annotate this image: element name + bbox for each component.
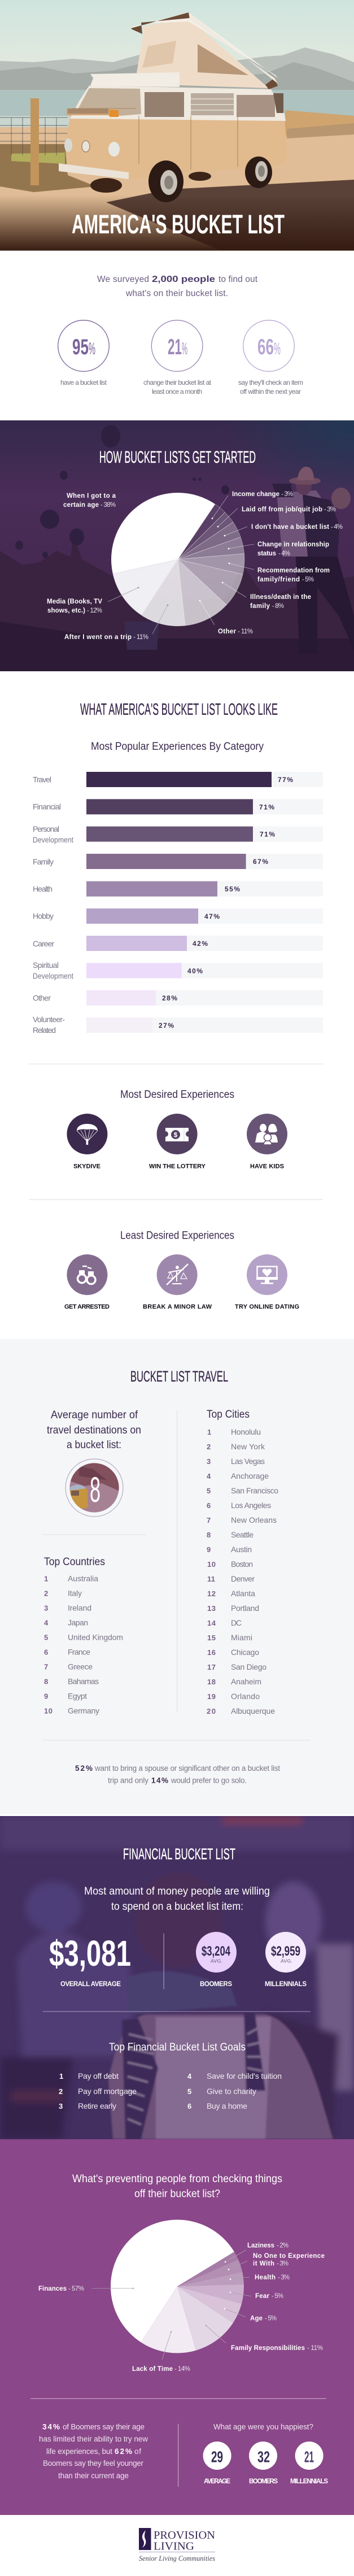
logo: provision living <box>139 2528 215 2562</box>
list: top cities: Chicago <box>231 1648 259 1657</box>
happiest age stats: 32 <box>257 2448 270 2465</box>
bar chart: experiences by category: 71% <box>260 831 275 839</box>
van body <box>65 86 287 179</box>
intro text: 2,000 people <box>152 275 215 284</box>
list: top cities: New York <box>231 1442 265 1451</box>
list: top cities: 3 <box>207 1457 211 1466</box>
stat circle: 8 destinations: 8 <box>90 1470 100 1510</box>
callout: travel companions <box>75 1764 280 1784</box>
list: top cities: New Orleans <box>231 1515 277 1524</box>
bar chart: experiences by category: Financial <box>33 802 61 811</box>
callout: boomers age text: Boomers say they feel younger <box>43 2459 143 2468</box>
pie 2 labels: - 3% <box>278 2274 290 2281</box>
pie labels: - 3% <box>281 491 293 498</box>
pie labels: status <box>257 550 276 557</box>
intro text: what's on their bucket list. <box>125 289 228 298</box>
icon: have kids <box>247 1114 287 1170</box>
pie labels: - 3% <box>324 506 336 513</box>
pie 2 labels <box>38 2243 325 2373</box>
list: top countries: Bahamas <box>68 1677 99 1686</box>
heading: financial bucket list: FINANCIAL BUCKET LIST <box>123 1845 235 1862</box>
stat: 95% have a bucket list <box>58 320 109 386</box>
bar chart: experiences by category: Family <box>33 857 54 866</box>
pie chart: what prevents people <box>111 2219 244 2353</box>
list: top countries: Top Countries <box>44 1556 105 1568</box>
pie 2 labels: - 5% <box>265 2316 277 2322</box>
pie labels: When I got to a <box>67 493 116 499</box>
list: top cities: 9 <box>207 1545 211 1554</box>
callout: boomers age text: life experiences, but <box>46 2447 112 2456</box>
logo: provision living: LIVING <box>154 2540 194 2553</box>
list: top cities: 7 <box>207 1516 211 1524</box>
van pop-top tent <box>137 18 269 88</box>
bar chart: experiences by category: 40% <box>187 967 203 975</box>
list: top cities: San Diego <box>231 1662 266 1671</box>
list: top cities: 10 <box>207 1560 216 1569</box>
stat: 95% have a bucket list: 95 <box>72 335 89 359</box>
list: top cities: 8 <box>207 1531 211 1539</box>
list: top countries: 4 <box>44 1618 49 1627</box>
stat: 95% have a bucket list: have a bucket list <box>60 379 107 386</box>
stat: 21% change list monthly: 21 <box>168 335 182 359</box>
list: top cities: Los Angeles <box>231 1501 271 1510</box>
list: top financial goals: 4 <box>187 2072 192 2080</box>
list: top countries: 10 <box>44 1706 53 1715</box>
list: top cities: Boston <box>231 1559 253 1569</box>
list: top financial goals <box>59 2041 282 2110</box>
list: top countries: 2 <box>44 1589 48 1598</box>
text: average number of destinations <box>47 1409 141 1451</box>
bar chart: experiences by category: Development <box>33 835 73 844</box>
stat: overall average: $3,081 <box>49 1933 131 1974</box>
panel: hero photo of camper van <box>0 0 354 251</box>
bar chart: experiences by category: 67% <box>253 858 268 866</box>
list: top cities: 14 <box>207 1619 216 1627</box>
list: top cities: 2 <box>207 1443 211 1451</box>
man with camera silhouette <box>272 467 354 654</box>
list: top financial goals: Top Financial Bucket List Goals <box>109 2041 246 2053</box>
icon: get arrested: GET ARRESTED <box>64 1304 110 1310</box>
bar chart: experiences by category: Career <box>33 939 54 948</box>
list: top financial goals: 2 <box>59 2087 63 2096</box>
heading: what's preventing people: off their bucket list? <box>134 2188 220 2200</box>
pie labels: family/friend <box>257 576 300 583</box>
list: top cities: Portland <box>231 1604 259 1613</box>
callout: boomers age text: has limited their ability to try new <box>39 2435 148 2443</box>
list: top countries: Japan <box>68 1618 88 1627</box>
pie labels: - 4% <box>278 550 290 557</box>
list: top cities: 11 <box>207 1575 215 1583</box>
bar chart: experiences by category: 42% <box>193 940 208 948</box>
pie labels: Laid off from job/quit job <box>242 506 322 513</box>
stat: millennials: MILLENNIALS <box>265 1981 307 1988</box>
callout: boomers age text: 62% <box>115 2447 132 2456</box>
subheading: least desired experiences: Least Desired Experiences <box>120 1230 234 1242</box>
list: top countries: Egypt <box>68 1692 87 1701</box>
callout: boomers age text: 34% <box>42 2423 60 2431</box>
icon: try online dating <box>235 1254 299 1310</box>
pie labels: After I went on a trip <box>64 634 132 641</box>
happiest age stats <box>203 2423 328 2485</box>
list: top cities: 13 <box>207 1604 216 1613</box>
icon: skydive: SKYDIVE <box>73 1163 100 1170</box>
bar chart: experiences by category <box>33 772 323 1035</box>
stat: 21% change list monthly <box>143 320 212 396</box>
callout: travel companions: 52% <box>75 1764 93 1773</box>
list: top cities: Miami <box>231 1633 252 1642</box>
list: top cities: Top Cities <box>207 1409 250 1421</box>
bar chart: experiences by category: 71% <box>259 803 274 811</box>
callout: boomers age text: than their current age <box>58 2471 129 2480</box>
subheading: most popular experiences: Most Popular Experiences By Category <box>91 741 264 753</box>
bar chart: experiences by category: Health <box>33 884 53 893</box>
pie labels: - 12% <box>87 607 102 614</box>
pie labels <box>47 491 343 641</box>
icon: win the lottery <box>149 1114 206 1170</box>
pie 2 labels: Finances <box>38 2286 67 2292</box>
icon: have kids: HAVE KIDS <box>250 1163 284 1170</box>
text: average number of destinations: a bucket list: <box>67 1439 121 1451</box>
list: top financial goals: Save for child's tuition <box>207 2071 282 2080</box>
bar chart: experiences by category: Spiritual <box>33 961 59 970</box>
list: top countries: France <box>68 1648 90 1657</box>
subheading: most desired experiences: Most Desired Experiences <box>120 1089 234 1101</box>
list: top countries: 9 <box>44 1692 48 1701</box>
pie 2 labels: Fear <box>255 2293 270 2300</box>
intro text <box>97 275 258 298</box>
list: top countries: 3 <box>44 1604 48 1613</box>
pie 2 labels: - 3% <box>277 2261 289 2267</box>
icon: win the lottery: $ <box>174 1131 178 1139</box>
bar chart: experiences by category: Related <box>33 1026 56 1035</box>
bar chart: experiences by category: 47% <box>204 913 220 920</box>
list: top countries: United Kingdom <box>68 1633 123 1642</box>
stat: 66% check an item off: 66 <box>257 335 274 359</box>
pie 2 labels: - 11% <box>307 2345 323 2352</box>
stat: 66% check an item off: off within the next year <box>240 388 301 396</box>
list: top financial goals: Retire early <box>78 2101 116 2110</box>
pie 2 labels: Lack of Time <box>132 2366 173 2373</box>
stat: boomers: $3,204 <box>202 1944 230 1959</box>
icon: fence post <box>30 98 39 185</box>
intro text: We surveyed <box>97 275 149 284</box>
logo: provision living: Senior Living Communities <box>139 2555 215 2562</box>
happiest age stats: 21 <box>304 2448 314 2465</box>
list: top countries: 6 <box>44 1648 48 1657</box>
van bumper <box>59 163 129 179</box>
list: top countries: 1 <box>44 1574 48 1583</box>
icon: break a minor law: BREAK A MINOR LAW <box>143 1304 212 1310</box>
stat: 66% check an item off: say they'll check an item <box>238 379 303 386</box>
callout: travel companions: want to bring a spouse or significant other on a bucket list <box>94 1764 280 1773</box>
heading: what's preventing people <box>72 2173 282 2200</box>
list: top cities: 5 <box>207 1487 211 1495</box>
intro text: to find out <box>218 275 258 284</box>
happiest age stats: BOOMERS <box>249 2478 278 2485</box>
van wheels <box>90 157 272 202</box>
pie labels: I don't have a bucket list <box>251 524 329 531</box>
pie chart: how lists get started <box>111 493 244 626</box>
callout: travel companions: 14% <box>151 1776 168 1784</box>
icon: win the lottery: WIN THE LOTTERY <box>149 1163 206 1170</box>
stat: boomers <box>196 1932 237 1988</box>
list: top cities: San Francisco <box>231 1486 278 1495</box>
list: top cities: Las Vegas <box>231 1457 265 1466</box>
stat: millennials <box>265 1932 307 1988</box>
icon: break a minor law <box>143 1254 212 1310</box>
pie labels: - 11% <box>133 634 148 641</box>
van headlights <box>64 138 120 157</box>
stat: 66% check an item off: % <box>274 340 281 358</box>
list: top countries <box>44 1556 123 1715</box>
callout: boomers age text <box>39 2423 148 2480</box>
list: top financial goals: Pay off mortgage <box>78 2087 137 2096</box>
list: top financial goals: Buy a home <box>207 2101 247 2110</box>
bar chart: experiences by category: Travel <box>33 775 51 784</box>
icon: get arrested <box>64 1254 110 1310</box>
panel: financial bucket list background <box>0 1816 354 2139</box>
list: top cities: 16 <box>207 1648 216 1657</box>
list: top cities: Albuquerque <box>231 1706 275 1715</box>
stat: boomers: AVG. <box>211 1958 222 1964</box>
stat: 21% change list monthly: % <box>182 340 187 358</box>
pie leader lines and dots <box>108 496 254 634</box>
bar chart: experiences by category: 27% <box>159 1022 174 1029</box>
bar chart: experiences by category: Volunteer- <box>33 1015 65 1024</box>
pie labels: Other <box>218 628 237 635</box>
heading: what's preventing people: What's preventing people from checking things <box>72 2173 282 2185</box>
list: top financial goals: 6 <box>187 2102 191 2110</box>
list: top countries: Ireland <box>68 1604 91 1613</box>
pie 2 labels: it With <box>253 2261 274 2267</box>
icon: try online dating: TRY ONLINE DATING <box>235 1304 299 1310</box>
list: top cities: 19 <box>207 1692 216 1701</box>
list: top cities: 4 <box>207 1472 211 1480</box>
stat: 21% change list monthly: change their bucket list at <box>143 379 212 386</box>
text: average number of destinations: Average number of <box>51 1409 138 1421</box>
pie labels: - 38% <box>100 502 116 509</box>
pie labels: - 11% <box>238 628 253 635</box>
happiest age stats: MILLENNIALS <box>290 2478 328 2485</box>
list: top cities: 6 <box>207 1501 211 1510</box>
panel: bucket list travel background <box>0 1339 354 1814</box>
van pop-top roof <box>131 12 278 78</box>
stat: millennials: $2,959 <box>271 1944 300 1959</box>
pie labels: Recommendation from <box>257 567 330 574</box>
stat: 66% check an item off <box>238 320 303 396</box>
pie 2 labels: - 5% <box>272 2293 283 2300</box>
pie 2 labels: - 14% <box>174 2366 190 2373</box>
icon: skydive <box>67 1114 107 1170</box>
panel: how bucket lists get started background <box>0 420 354 671</box>
pie labels: - 4% <box>331 524 343 531</box>
list: top cities: Seattle <box>231 1530 254 1539</box>
pie labels: - 5% <box>302 576 314 583</box>
logo: provision living: PROVISION <box>154 2529 215 2542</box>
pie 2 labels: Age <box>250 2316 263 2322</box>
bar chart: experiences by category: Development <box>33 971 73 980</box>
heading: bucket list travel: BUCKET LIST TRAVEL <box>130 1368 228 1385</box>
list: top countries: Greece <box>68 1662 93 1671</box>
pie labels: Change in relationship <box>257 541 329 548</box>
list: top countries: Australia <box>68 1574 98 1583</box>
list: top cities: 18 <box>207 1678 216 1686</box>
list: top cities: 17 <box>207 1663 216 1671</box>
list: top cities: 15 <box>207 1634 216 1642</box>
list: top cities: 1 <box>207 1428 211 1436</box>
list: top countries: 5 <box>44 1633 48 1642</box>
text: most amount of money: to spend on a bucket list item: <box>111 1901 243 1913</box>
pie labels: Illness/death in the <box>250 594 311 601</box>
pie 2 labels: - 2% <box>277 2243 289 2249</box>
text: most amount of money <box>84 1886 270 1913</box>
list: top financial goals: Pay off debt <box>78 2071 119 2080</box>
list: top countries: Italy <box>68 1589 82 1598</box>
pie labels: family <box>250 603 270 610</box>
bar chart: experiences by category: 55% <box>225 885 240 893</box>
bar chart: experiences by category: Other <box>33 993 51 1002</box>
stat: 95% have a bucket list: % <box>89 340 95 358</box>
list: top cities: Orlando <box>231 1692 260 1701</box>
stat: 21% change list monthly: least once a month <box>152 388 202 396</box>
list: top countries: Germany <box>68 1706 99 1715</box>
pie 2 labels: Health <box>255 2274 276 2281</box>
list: top financial goals: 1 <box>59 2072 63 2080</box>
callout: boomers age text: of <box>134 2447 141 2456</box>
callout: travel companions: would prefer to go solo. <box>171 1776 247 1784</box>
stat: millennials: AVG. <box>281 1958 292 1964</box>
pie labels: shows, etc.) <box>47 607 85 614</box>
list: top financial goals: 3 <box>59 2102 63 2110</box>
list: top cities: Austin <box>231 1545 252 1554</box>
text: average number of destinations: travel destinations on <box>47 1424 141 1436</box>
pie labels: Media (Books, TV <box>47 598 102 605</box>
list: top financial goals: Give to charity <box>207 2087 256 2096</box>
list: top cities: Denver <box>231 1574 255 1583</box>
list: top cities: Anaheim <box>231 1677 261 1686</box>
pie labels: certain age <box>63 502 99 509</box>
bar chart: experiences by category: 28% <box>162 994 177 1002</box>
happiest age stats: AVERAGE <box>204 2478 230 2485</box>
list: top cities <box>207 1409 278 1715</box>
stat: boomers: BOOMERS <box>200 1981 232 1988</box>
bar chart: experiences by category: Hobby <box>33 911 54 920</box>
pie 2 leader lines and dots <box>91 2250 252 2360</box>
pie labels: Income change <box>232 491 279 498</box>
text: most amount of money: Most amount of money people are willing <box>84 1886 270 1897</box>
panel: what's preventing people <box>0 2139 354 2515</box>
list: top countries: 8 <box>44 1677 48 1686</box>
pie 2 labels: Laziness <box>247 2243 274 2249</box>
happiest age stats: What age were you happiest? <box>213 2423 313 2431</box>
stat circle: 8 destinations <box>65 1459 123 1517</box>
list: top financial goals: 5 <box>187 2087 191 2096</box>
pie 2 labels: - 57% <box>68 2286 84 2292</box>
list: top cities: DC <box>231 1618 242 1627</box>
stat: overall average <box>49 1933 131 1988</box>
list: top cities: Anchorage <box>231 1471 269 1480</box>
bar chart: experiences by category: Personal <box>33 824 59 833</box>
list: top countries: 7 <box>44 1662 48 1671</box>
pie 2 labels: Family Responsibilities <box>231 2345 305 2352</box>
bar chart: experiences by category: 77% <box>278 776 293 784</box>
list: top cities: 20 <box>207 1707 216 1715</box>
happiest age stats: 29 <box>211 2448 223 2465</box>
pie 2 labels: No One to Experience <box>253 2253 325 2260</box>
pie labels: - 8% <box>272 603 284 610</box>
callout: boomers age text: of Boomers say their age <box>63 2423 145 2431</box>
callout: travel companions: trip and only <box>108 1776 148 1784</box>
list: top cities: Atlanta <box>231 1589 255 1598</box>
list: top cities: Honolulu <box>231 1427 261 1436</box>
list: top cities: 12 <box>207 1589 216 1598</box>
stat: overall average: OVERALL AVERAGE <box>60 1981 121 1988</box>
